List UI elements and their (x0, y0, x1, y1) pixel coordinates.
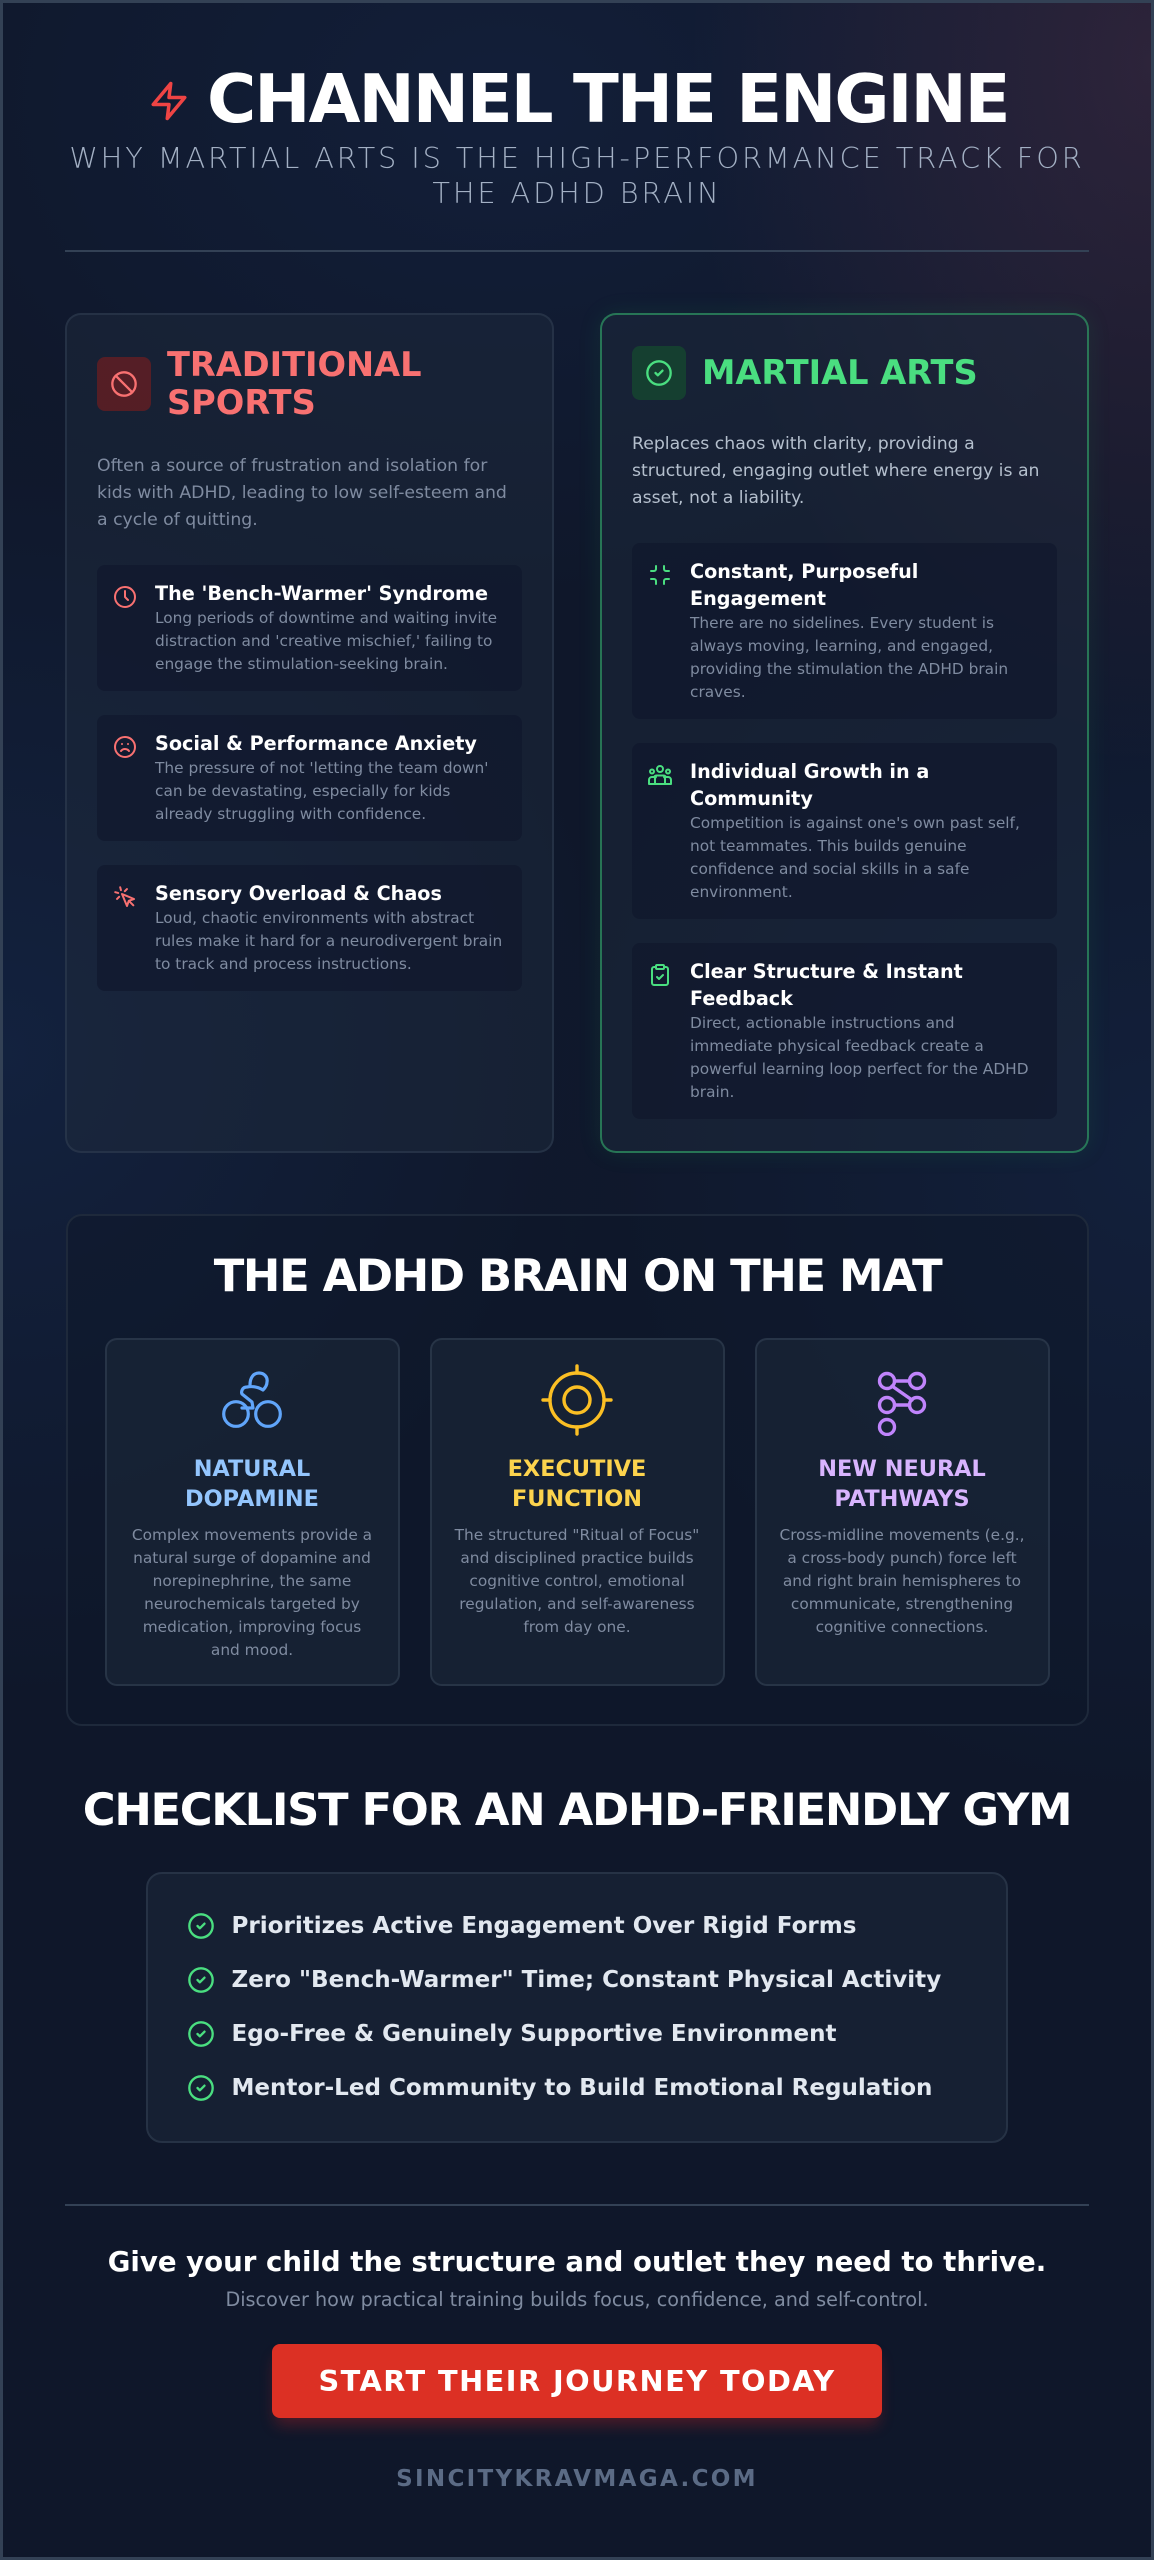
panel: traditional sports (65, 313, 554, 1153)
panel: checklist (146, 1872, 1008, 2143)
panel: the adhd brain on the mat (66, 1214, 1089, 1726)
item: social and performance anxiety: The pressure of not 'letting the team down' can be devastating, especially for kids already struggling with confidence. (155, 759, 488, 823)
closing headline: Give your child the structure and outlet they need to thrive. (108, 2245, 1046, 2278)
closing subtext: Discover how practical training builds focus, confidence, and self-control. (225, 2288, 929, 2311)
card title: NEW NEURAL PATHWAYS (818, 1456, 986, 1512)
button: start their journey today: START THEIR JOURNEY TODAY (318, 2364, 836, 2398)
button: start their journey today (272, 2344, 882, 2418)
icon: ban (97, 357, 151, 411)
item: constant purposeful engagement: There are no sidelines. Every student is always moving, learning, and engaged, providing the stimulation the ADHD brain craves. (690, 614, 1008, 701)
item: social and performance anxiety: Social & Performance Anxiety (155, 732, 477, 755)
title with lightning icon (151, 60, 1009, 138)
item: sensory overload and chaos: Loud, chaotic environments with abstract rules make it hard for a neurodivergent brain to track and process instructions. (155, 909, 502, 973)
panel: martial arts (600, 313, 1089, 1153)
item: bench-warmer syndrome: Long periods of downtime and waiting invite distraction and 'creative mischief,' failing to engage the stimulation-seeking brain. (155, 609, 497, 673)
check item 4: Mentor-Led Community to Build Emotional Regulation (232, 2075, 932, 2101)
heading: martial arts (632, 346, 978, 400)
card title: EXECUTIVE FUNCTION (508, 1456, 646, 1512)
item: individual growth in a community: Competition is against one's own past self, not teammates. This builds genuine confidence and social skills in a safe environment. (690, 814, 1020, 901)
card: new neural pathways (755, 1338, 1050, 1686)
check item 2: Zero "Bench-Warmer" Time; Constant Physical Activity (232, 1967, 941, 1993)
item: individual growth in a community (632, 743, 1057, 919)
website: SINCITYKRAVMAGA.COM (396, 2466, 758, 2492)
card: natural dopamine (105, 1338, 400, 1686)
item: bench-warmer syndrome (97, 565, 522, 691)
item: constant purposeful engagement: Constant, Purposeful Engagement (690, 560, 918, 610)
card text: Cross-midline movements (e.g., a cross-body punch) force left and right brain hemispheres to communicate, strengthening cognitive connections. (779, 1526, 1024, 1636)
intro text: Replaces chaos with clarity, providing a structured, engaging outlet where energy is an asset, not a liability. (632, 434, 1039, 508)
icon: lightning bolt (151, 82, 187, 120)
card text: The structured "Ritual of Focus" and disciplined practice builds cognitive control, emotional regulation, and self-awareness from day one. (455, 1526, 699, 1636)
item: sensory overload and chaos (97, 865, 522, 991)
subtitle: WHY MARTIAL ARTS IS THE HIGH-PERFORMANCE TRACK FOR THE ADHD BRAIN (69, 141, 1085, 210)
check item 1: Prioritizes Active Engagement Over Rigid Forms (232, 1913, 856, 1939)
icon: check circle (632, 346, 686, 400)
header (69, 60, 1085, 210)
icon: neural pathways (878, 1372, 926, 1436)
icon: bike (222, 1371, 282, 1428)
item: bench-warmer syndrome: The 'Bench-Warmer' Syndrome (155, 582, 488, 605)
item: clear structure and instant feedback (632, 943, 1057, 1119)
footer call to action (108, 2245, 1046, 2492)
item: constant purposeful engagement (632, 543, 1057, 719)
intro text: Often a source of frustration and isolation for kids with ADHD, leading to low self-esteem and a cycle of quitting. (97, 456, 507, 530)
item: clear structure and instant feedback: Clear Structure & Instant Feedback (690, 960, 963, 1010)
card: executive function (430, 1338, 725, 1686)
title: CHANNEL THE ENGINE (207, 60, 1009, 138)
card title: NATURAL DOPAMINE (185, 1456, 319, 1512)
icon: crosshair target (541, 1364, 613, 1436)
item: social and performance anxiety (97, 715, 522, 841)
card text: Complex movements provide a natural surge of dopamine and norepinephrine, the same neurochemicals targeted by medication, improving focus and mood. (132, 1526, 372, 1659)
heading: checklist: CHECKLIST FOR AN ADHD-FRIENDLY GYM (83, 1783, 1071, 1836)
check item 3: Ego-Free & Genuinely Supportive Environment (232, 2021, 837, 2047)
item: individual growth in a community: Individual Growth in a Community (690, 760, 929, 810)
heading: traditional sports: TRADITIONAL SPORTS (167, 345, 422, 422)
item: clear structure and instant feedback: Direct, actionable instructions and immediate physical feedback create a powerful learning loop perfect for the ADHD brain. (690, 1014, 1029, 1101)
item: sensory overload and chaos: Sensory Overload & Chaos (155, 882, 442, 905)
heading: brain on the mat: THE ADHD BRAIN ON THE MAT (214, 1249, 941, 1302)
heading: martial arts: MARTIAL ARTS (702, 353, 978, 392)
